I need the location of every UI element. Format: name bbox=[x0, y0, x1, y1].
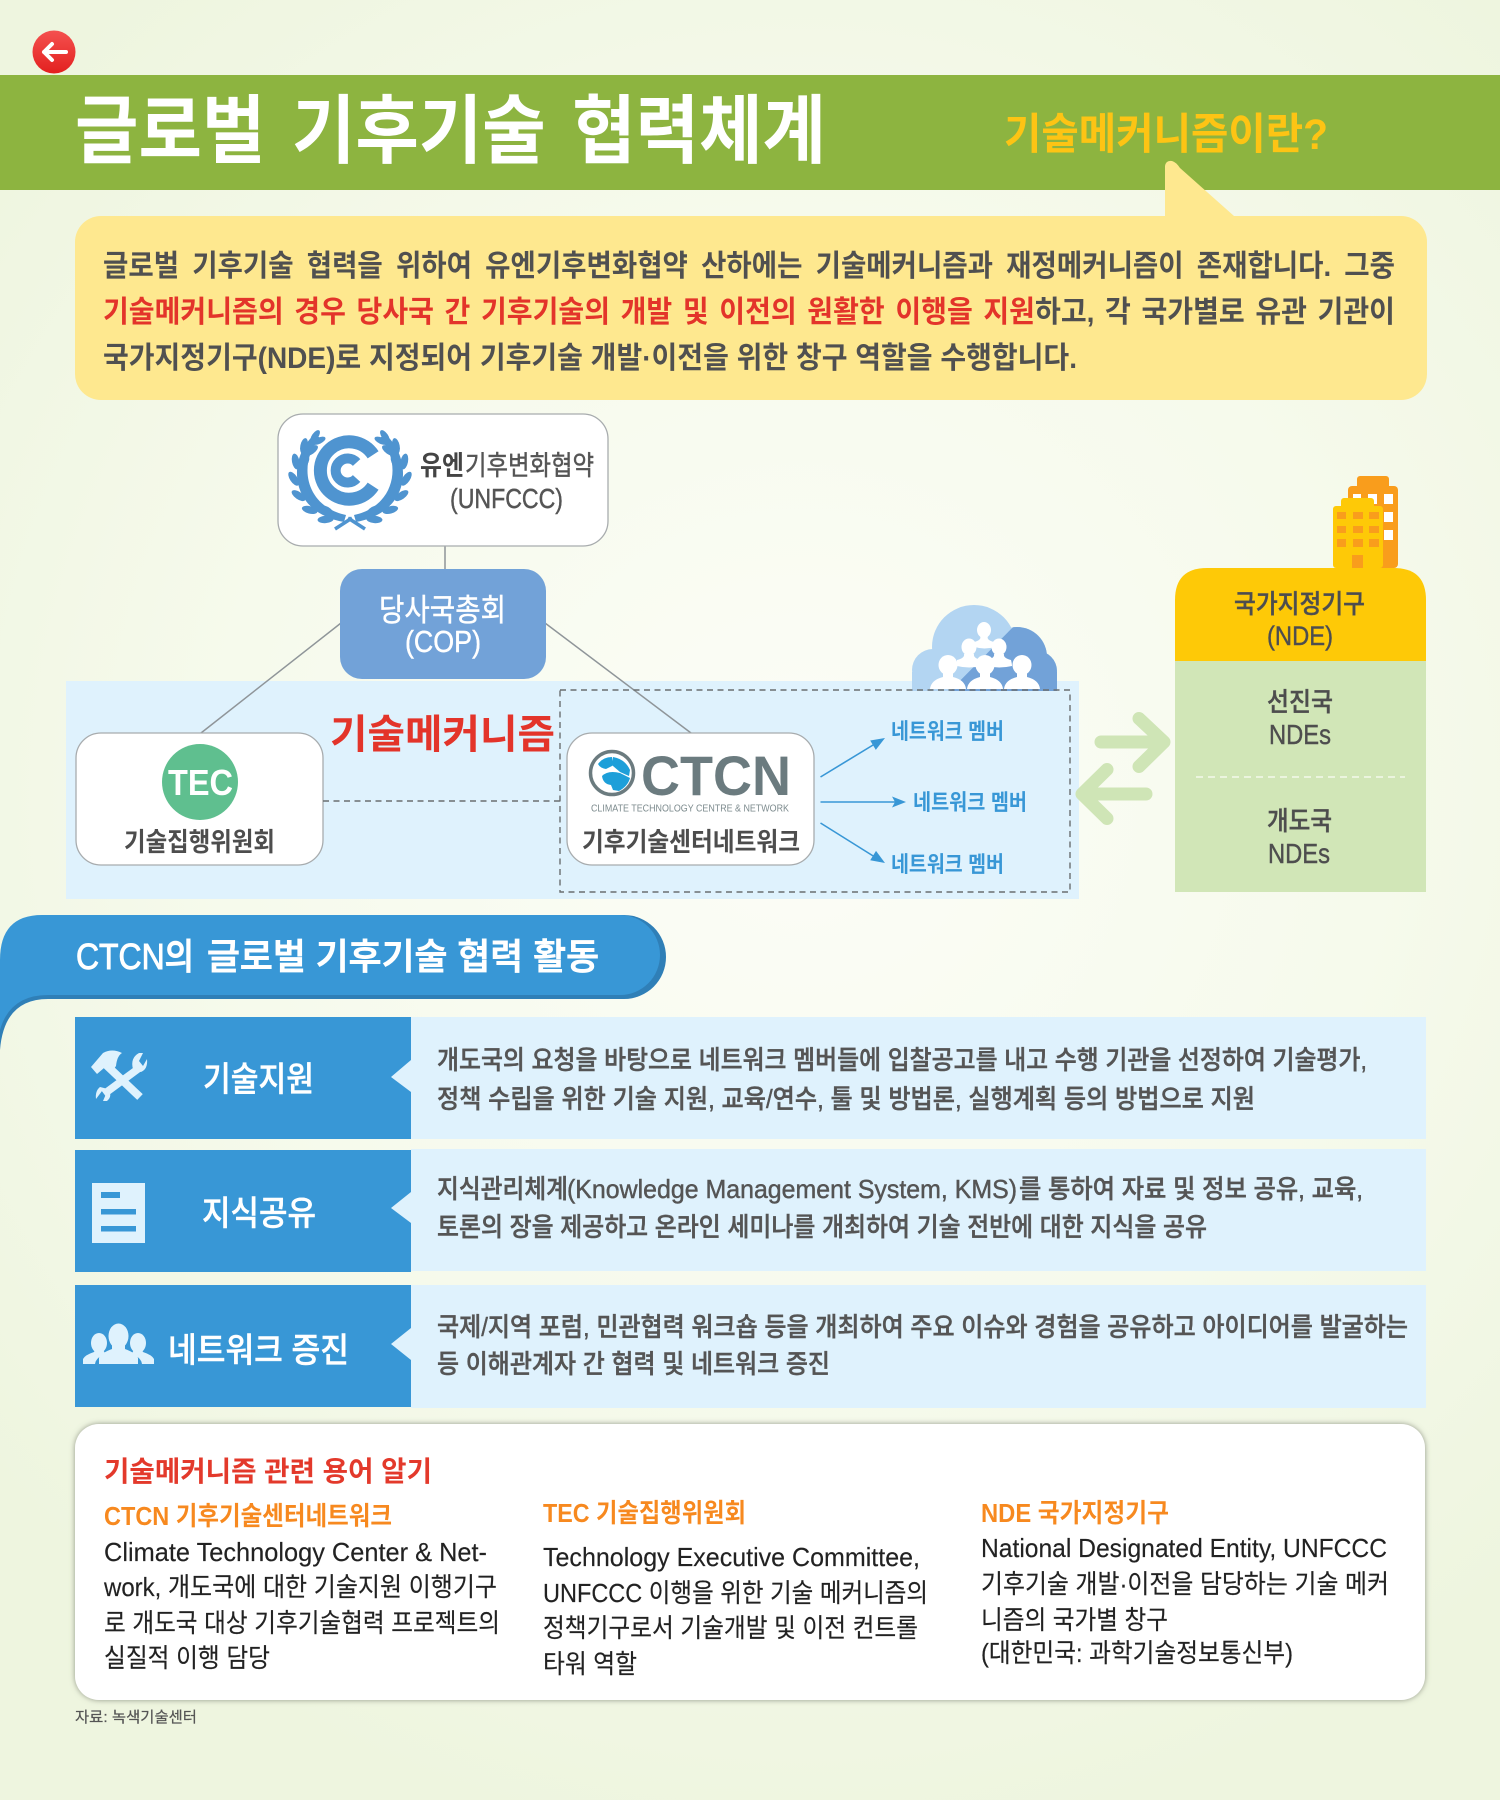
glossary: NDE: (대한민국: 과학기술정보통신부) bbox=[981, 1638, 1293, 1668]
panel: TEC: 기술집행위원회 bbox=[124, 827, 275, 857]
intro text line 1: 글로벌 기후기술 협력을 위하여 유엔기후변화협약 산하에는 기술메커니즘과 재정메커니즘이 존재합니다. 그중 bbox=[103, 250, 1395, 283]
icon: people bbox=[83, 1324, 154, 1364]
title: 글로벌 기후기술 협력체계 bbox=[75, 89, 826, 173]
panel: COP bbox=[340, 569, 546, 679]
description: knowledge sharing: 토론의 장을 제공하고 온라인 세미나를 개최하여 기술 전반에 대한 지식을 공유 bbox=[437, 1212, 1207, 1242]
description: network promotion: 국제/지역 포럼, 민관협력 워크숍 등을 개최하여 주요 이슈와 경험을 공유하고 아이디어를 발굴하는 bbox=[437, 1312, 1408, 1342]
panel: network promotion: 네트워크 증진 bbox=[168, 1332, 349, 1370]
glossary: NDE: 니즘의 국가별 창구 bbox=[981, 1605, 1168, 1635]
glossary: NDE bbox=[981, 1498, 1389, 1668]
glossary heading: 기술메커니즘 관련 용어 알기 bbox=[104, 1456, 432, 1487]
description: knowledge sharing: 지식관리체계 bbox=[437, 1174, 568, 1204]
glossary: CTCN bbox=[103, 1501, 500, 1673]
icon: CTCN logo bbox=[590, 744, 791, 814]
label: network member 3: 네트워크 멤버 bbox=[891, 852, 1004, 877]
description: knowledge sharing: 를 통하여 자료 및 정보 공유, 교육, bbox=[1019, 1174, 1363, 1204]
callout: intro box bbox=[75, 161, 1427, 400]
description: technical support: 개도국의 요청을 바탕으로 네트워크 멤버들에 입찰공고를 내고 수행 기관을 선정하여 기술평가, bbox=[437, 1045, 1367, 1075]
panel: NDE: NDEs bbox=[1268, 838, 1330, 869]
panel: CTCN: 기후기술센터네트워크 bbox=[582, 827, 800, 857]
panel: mechanism background bbox=[66, 681, 1079, 899]
arrow: right exchange bbox=[1101, 718, 1164, 766]
panel: NDE: (NDE) bbox=[1267, 621, 1333, 651]
description: network promotion bbox=[437, 1312, 1408, 1379]
source note: 자료: 녹색기술센터 bbox=[75, 1709, 197, 1726]
description: knowledge sharing: (Knowledge Management System, KMS) bbox=[567, 1174, 1017, 1204]
connector: UNFCCC to COP bbox=[444, 546, 446, 570]
panel: COP: 당사국총회 bbox=[379, 593, 506, 628]
glossary: CTCN: Climate Technology Center & Net- bbox=[104, 1537, 487, 1567]
intro text line 3: 국가지정기구(NDE)로 지정되어 기후기술 개발·이전을 위한 창구 역할을 수행합니다. bbox=[103, 342, 1077, 375]
icon: network cloud bbox=[912, 605, 1057, 691]
label: network member 1: 네트워크 멤버 bbox=[891, 719, 1004, 744]
glossary: TEC: 타워 역할 bbox=[543, 1649, 637, 1679]
panel: NDE bbox=[1175, 568, 1426, 892]
panel: UNFCCC bbox=[278, 414, 608, 546]
glossary: TEC: TEC 기술집행위원회 bbox=[543, 1498, 746, 1528]
label: UNFCCC korean: 기후변화협약 bbox=[465, 451, 594, 481]
panel: CTCN bbox=[567, 733, 814, 865]
icon: CTCN logo: CTCN bbox=[641, 744, 791, 807]
subtitle: 기술메커니즘이란? bbox=[1004, 111, 1328, 159]
section heading: CTCN activities: 글로벌 기후기술 협력 활동 bbox=[207, 936, 599, 977]
icon: document bbox=[92, 1183, 145, 1243]
glossary: TEC: UNFCCC 이행을 위한 기술 메커니즘의 bbox=[543, 1578, 928, 1608]
glossary: TEC: Technology Executive Committee, bbox=[543, 1542, 920, 1572]
panel: glossary bbox=[75, 1424, 1425, 1700]
panel: NDE: 선진국 bbox=[1267, 687, 1333, 717]
intro text line 2 end: 하고, 각 국가별로 유관 기관이 bbox=[1035, 296, 1395, 329]
glossary: NDE: 기후기술 개발·이전을 담당하는 기술 메커 bbox=[981, 1569, 1389, 1599]
panel: network dashed frame bbox=[560, 690, 1070, 892]
glossary: NDE: National Designated Entity, UNFCCC bbox=[981, 1533, 1387, 1563]
icon: building bbox=[1333, 476, 1398, 568]
icon: UNFCCC logo bbox=[286, 427, 414, 529]
icon: CTCN logo: CLIMATE TECHNOLOGY CENTRE & NETWORK bbox=[591, 802, 789, 814]
panel: network promotion bbox=[75, 1285, 1426, 1408]
intro text line 2 red: 기술메커니즘의 경우 당사국 간 기후기술의 개발 및 이전의 원활한 이행을 지원 bbox=[103, 296, 1035, 329]
panel: TEC bbox=[76, 733, 323, 865]
description: technical support bbox=[437, 1045, 1367, 1114]
label: UNFCCC: (UNFCCC) bbox=[450, 483, 563, 514]
panel: technical support bbox=[75, 1017, 1426, 1139]
glossary: CTCN: 실질적 이행 담당 bbox=[104, 1643, 270, 1673]
description: knowledge sharing bbox=[437, 1174, 1363, 1242]
panel: knowledge sharing bbox=[75, 1149, 1426, 1272]
arrow: to network member 2 bbox=[820, 796, 906, 808]
heading: technology mechanism: 기술메커니즘 bbox=[330, 713, 555, 757]
label: UNFCCC korean bbox=[420, 451, 594, 481]
glossary: TEC: 정책기구로서 기술개발 및 이전 컨트롤 bbox=[543, 1613, 918, 1643]
glossary: CTCN: CTCN 기후기술센터네트워크 bbox=[104, 1501, 392, 1531]
panel: NDE: NDEs bbox=[1269, 719, 1331, 750]
description: network promotion: 등 이해관계자 간 협력 및 네트워크 증진 bbox=[437, 1349, 830, 1379]
panel: knowledge sharing: 지식공유 bbox=[202, 1195, 316, 1233]
arrow: to network member 3 bbox=[820, 823, 885, 863]
icon: TEC logo: TEC bbox=[168, 762, 233, 803]
panel: NDE: 국가지정기구 bbox=[1234, 589, 1365, 619]
connector: TEC to CTCN dashed bbox=[323, 800, 560, 802]
connector: COP to TEC bbox=[201, 623, 341, 733]
icon: TEC logo bbox=[162, 744, 238, 820]
description: technical support: 정책 수립을 위한 기술 지원, 교육/연수, 툴 및 방법론, 실행계획 등의 방법으로 지원 bbox=[437, 1084, 1255, 1114]
section heading: CTCN activities bbox=[0, 915, 666, 1050]
panel: NDE: 개도국 bbox=[1267, 806, 1332, 836]
label: network member 2: 네트워크 멤버 bbox=[913, 790, 1027, 815]
arrow: left exchange bbox=[1082, 770, 1146, 818]
glossary: CTCN: work, 개도국에 대한 기술지원 이행기구 bbox=[103, 1572, 497, 1602]
header band bbox=[0, 75, 1500, 190]
icon: back button bbox=[32, 30, 76, 74]
label: UNFCCC korean: 유엔 bbox=[420, 451, 464, 481]
panel: COP: (COP) bbox=[405, 624, 481, 659]
glossary: CTCN: 로 개도국 대상 기후기술협력 프로젝트의 bbox=[104, 1608, 500, 1638]
glossary: NDE: NDE 국가지정기구 bbox=[981, 1498, 1169, 1528]
icon: tools bbox=[91, 1050, 147, 1101]
panel: technical support: 기술지원 bbox=[203, 1061, 314, 1099]
section heading: CTCN activities: CTCN의 bbox=[76, 936, 194, 977]
connector: COP to CTCN bbox=[545, 623, 691, 733]
arrow: to network member 1 bbox=[820, 738, 885, 777]
glossary: TEC bbox=[543, 1498, 928, 1679]
